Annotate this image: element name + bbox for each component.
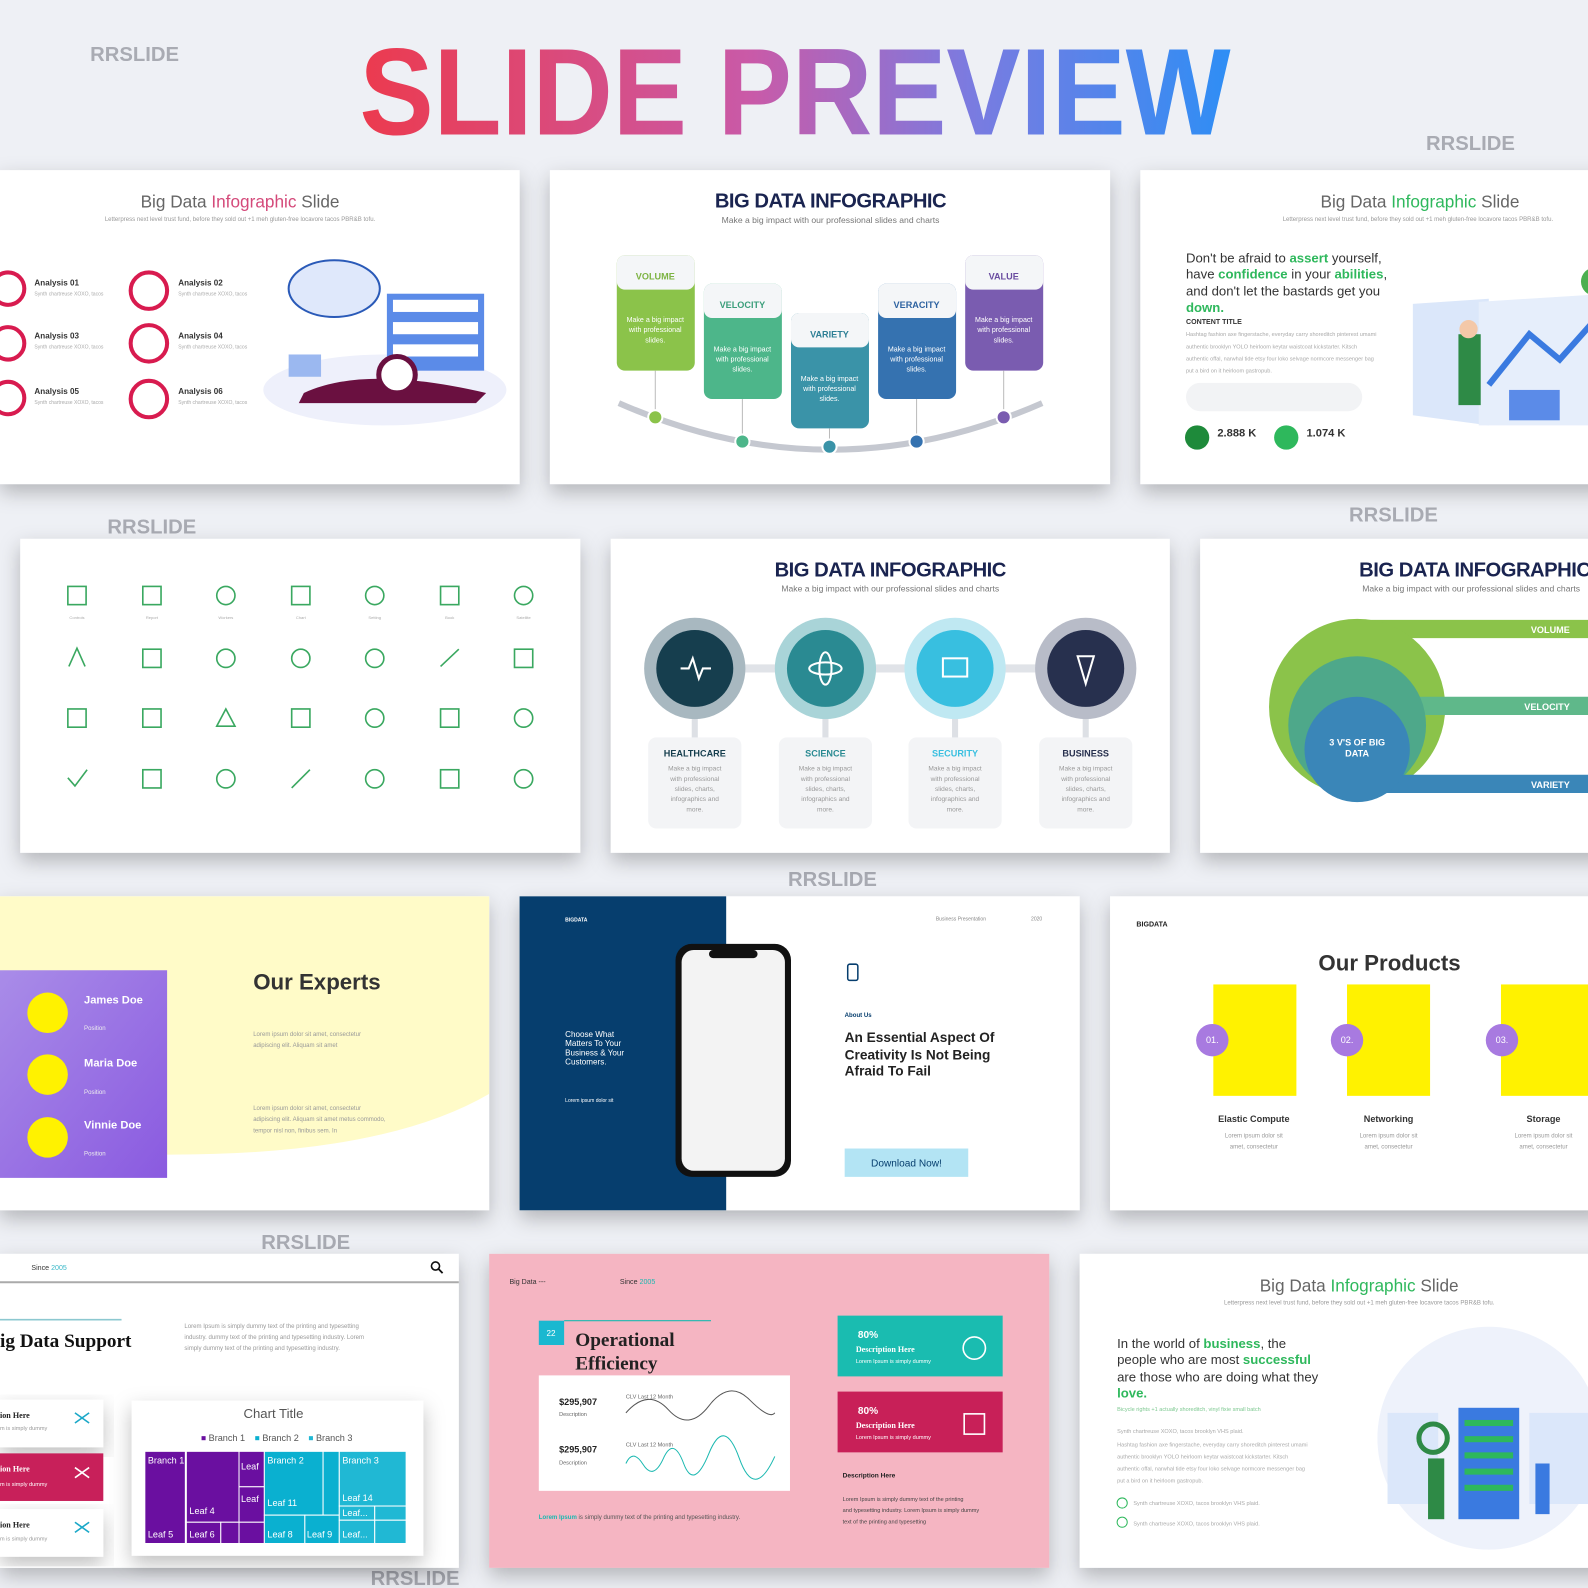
slide: analysis: Big Data Infographic Slide xyxy=(141,192,340,212)
slide: assert yourself: authentic offal, narwhal tide etsy four loko selvage normcore messenger bag xyxy=(1186,357,1374,363)
slide: operational efficiency: 22 xyxy=(546,1329,556,1338)
slide: operational efficiency: Description Here xyxy=(856,1345,915,1354)
slide: big data infographic 5V: with professional xyxy=(802,385,856,393)
slide: big data support treemap: ion Here xyxy=(0,1465,30,1474)
watermark: RRSLIDE xyxy=(90,44,179,66)
slide: icon grid: Report xyxy=(146,615,159,620)
slide: big data infographic 5V: Make a big impact xyxy=(801,375,858,383)
slide: big data infographic 5V: VOLUME xyxy=(636,272,675,282)
slide: operational efficiency: CLV Last 12 Month xyxy=(626,1442,673,1448)
slide: 3 Vs: VOLUME xyxy=(1531,625,1570,635)
slide: big data infographic 5V: slides. xyxy=(907,366,927,374)
illustration: server xyxy=(1377,1327,1588,1550)
slide: phone: Creativity Is Not Being xyxy=(845,1047,990,1062)
slide: assert yourself: Letterpress next level trust fund, before they sold out +1 meh gluten-free locavore tacos PBR&B tofu. xyxy=(1283,217,1553,223)
slide: world of business: Hashtag fashion axe fingerstache, everyday carry shoreditch pinterest umami xyxy=(1117,1442,1308,1448)
slide: 4 circles: more. xyxy=(1077,806,1094,813)
slide: icon grid: Controls xyxy=(69,615,85,620)
slide: world of business: In the world of business, the xyxy=(1117,1336,1286,1351)
slide: assert yourself: CONTENT TITLE xyxy=(1186,318,1242,326)
slide: world of business: Big Data Infographic Slide xyxy=(1260,1275,1459,1295)
slide: phone: Business & Your xyxy=(565,1048,624,1057)
slide: our experts: Maria Doe xyxy=(84,1057,137,1069)
slide: analysis: Analysis 04 xyxy=(178,331,223,340)
slide: big data support treemap: simply dummy text of the printing and typesetting industry. xyxy=(184,1346,340,1352)
slide: phone xyxy=(520,896,1080,1210)
chart: treemap: Branch 3 xyxy=(316,1433,352,1443)
slide: 4 circles xyxy=(611,539,1170,853)
slide: operational efficiency xyxy=(489,1254,1049,1568)
slide: operational efficiency: text of the printing and typesetting xyxy=(843,1519,926,1525)
slide: our products: Storage xyxy=(1527,1114,1560,1124)
slide: 3 Vs xyxy=(1200,539,1588,853)
slide: analysis: Letterpress next level trust fund, before they sold out +1 meh gluten-free locavore tacos PBR&B tofu. xyxy=(105,217,376,223)
slide: 4 circles: HEALTHCARE xyxy=(664,749,726,759)
slide: operational efficiency: Description xyxy=(559,1412,587,1418)
slide: big data infographic 5V: with professional xyxy=(628,326,682,334)
phone xyxy=(676,944,791,1177)
slide: analysis: Synth chartreuse XOXO, tacos xyxy=(34,344,104,350)
slide: big data support treemap: ig Data Support xyxy=(0,1331,132,1352)
slide: 4 circles: SECURITY xyxy=(932,749,978,759)
chart: treemap: Leaf 8 xyxy=(267,1529,293,1539)
slide: analysis: Synth chartreuse XOXO, tacos xyxy=(34,400,104,406)
slide: assert yourself: have confidence in your abilities, xyxy=(1186,267,1387,282)
chart: treemap: Branch 3 xyxy=(342,1455,379,1465)
slide: world of business: Letterpress next level trust fund, before they sold out +1 meh gluten-free locavore tacos PBR&B tofu. xyxy=(1224,1300,1495,1306)
slide: analysis: Analysis 02 xyxy=(178,279,223,288)
slide: analysis: Analysis 05 xyxy=(34,387,79,396)
chart: treemap: Branch 1 xyxy=(148,1455,184,1465)
slide: phone: Download Now! xyxy=(871,1159,942,1170)
slide: world of business: Synth chartreuse XOXO, tacos brooklyn VHS plaid. xyxy=(1133,1501,1260,1507)
slide: 4 circles: slides, charts, xyxy=(675,786,715,793)
slide: 3 Vs: VARIETY xyxy=(1531,780,1570,790)
slide: big data support treemap: Since 2005 xyxy=(31,1264,67,1272)
slide: our products: 03. xyxy=(1496,1035,1508,1045)
slide: icon grid: Setting xyxy=(368,615,381,620)
slide: our experts xyxy=(0,896,489,1210)
slide: 4 circles: Make a big impact xyxy=(928,766,982,773)
slide: operational efficiency: Description xyxy=(559,1461,587,1467)
slide: assert yourself: Don't be afraid to assert yourself, xyxy=(1186,250,1382,265)
watermark: RRSLIDE xyxy=(261,1232,350,1254)
chart: treemap: Leaf... xyxy=(342,1508,368,1518)
slide: our products xyxy=(1110,896,1588,1210)
slide: world of business: Synth chartreuse XOXO, tacos brooklyn VHS plaid. xyxy=(1133,1521,1260,1527)
slide: big data support treemap: m is simply dummy xyxy=(0,1426,48,1432)
slide: big data infographic 5V: slides. xyxy=(732,366,752,374)
slide: our experts: adipiscing elit. Aliquam sit amet xyxy=(253,1043,338,1049)
chart: treemap: Branch 2 xyxy=(262,1433,299,1443)
slide: operational efficiency: Lorem Ipsum is simply dummy text of the printing xyxy=(843,1497,964,1503)
slide: analysis: Synth chartreuse XOXO, tacos xyxy=(178,400,248,406)
slide: 4 circles: infographics and xyxy=(931,796,980,803)
slide: analysis: Analysis 06 xyxy=(178,387,223,396)
slide: 4 circles: SCIENCE xyxy=(805,749,846,759)
slide: 4 circles: with professional xyxy=(1060,776,1111,783)
slide: operational efficiency: and typesetting industry. Lorem Ipsum is simply dummy xyxy=(843,1508,979,1514)
chart: treemap: Leaf 6 xyxy=(189,1529,215,1539)
slide: big data infographic 5V: with professional xyxy=(715,356,769,364)
slide: 4 circles: Make a big impact xyxy=(799,766,852,773)
slide: assert yourself: down. xyxy=(1186,300,1224,315)
slide: world of business: love. xyxy=(1117,1386,1147,1401)
slide: our experts: Vinnie Doe xyxy=(84,1119,141,1131)
slide: big data infographic 5V: slides. xyxy=(819,395,840,403)
slide: our products: 02. xyxy=(1341,1035,1353,1045)
chart: treemap: Chart Title xyxy=(243,1406,303,1421)
slide: big data infographic 5V: Make a big impact xyxy=(975,316,1032,324)
slide: our products: amet, consectetur xyxy=(1519,1145,1568,1151)
slide: phone: Lorem ipsum dolor sit xyxy=(565,1098,614,1104)
slide: our products: Lorem ipsum dolor sit xyxy=(1225,1133,1283,1139)
slide: our products: Lorem ipsum dolor sit xyxy=(1515,1133,1573,1139)
slide: 4 circles: BIG DATA INFOGRAPHIC xyxy=(775,559,1007,581)
slide: phone: 2020 xyxy=(1031,917,1042,923)
slide: 4 circles: with professional xyxy=(930,776,980,783)
illustration: cloud server xyxy=(263,260,506,425)
slide: big data support treemap: industry. dummy text of the printing and typesetting industry. Lorem xyxy=(184,1335,364,1341)
slide: world of business: Bicycle rights +1 actually shoreditch, vinyl fixie small batch xyxy=(1117,1407,1261,1413)
slide: analysis: Synth chartreuse XOXO, tacos xyxy=(178,292,248,298)
chart: treemap: Leaf xyxy=(241,1494,259,1504)
chart: treemap: Leaf xyxy=(241,1462,259,1472)
slide: assert yourself: and don't let the bastards get you xyxy=(1186,284,1380,299)
slide: 4 circles: more. xyxy=(947,806,964,813)
slide: assert yourself: put a bird on it heirloom gastropub. xyxy=(1186,369,1272,375)
chart: treemap: Leaf 4 xyxy=(189,1506,215,1516)
slide: operational efficiency: 80% xyxy=(858,1330,878,1341)
slide: our products: amet, consectetur xyxy=(1230,1145,1278,1151)
slide: assert yourself: Hashtag fashion axe fingerstache, everyday carry shoreditch pinterest umami xyxy=(1186,332,1376,338)
slide: world of business xyxy=(1080,1254,1588,1568)
watermark: RRSLIDE xyxy=(107,517,196,539)
slide: our products: 01. xyxy=(1206,1035,1219,1045)
slide: our products: Our Products xyxy=(1318,950,1461,975)
slide: phone: Choose What xyxy=(565,1030,615,1039)
slide: phone: Business Presentation xyxy=(936,917,986,923)
slide: icon grid xyxy=(20,539,580,853)
slide: big data infographic 5V: VELOCITY xyxy=(720,300,765,310)
slide: phone: Customers. xyxy=(565,1057,607,1066)
watermark: RRSLIDE xyxy=(1349,505,1438,527)
slide: 4 circles: more. xyxy=(686,806,703,813)
slide: operational efficiency: $295,907 xyxy=(559,1397,597,1407)
slide: big data infographic 5V: with professional xyxy=(889,356,943,364)
slide: our experts: Our Experts xyxy=(253,970,381,995)
slide: our experts: Lorem ipsum dolor sit amet, consectetur xyxy=(253,1032,361,1038)
slide: assert yourself: authentic brooklyn YOLO heirloom keytar waistcoat kickstarter. Kitsch xyxy=(1186,344,1357,350)
slide: analysis: Analysis 03 xyxy=(34,331,79,340)
slide: big data infographic 5V xyxy=(550,170,1110,484)
slide: analysis: Analysis 01 xyxy=(34,279,79,288)
slide: big data infographic 5V: Make a big impact xyxy=(888,345,945,353)
slide: our products: Elastic Compute xyxy=(1218,1114,1290,1124)
slide: 3 Vs: BIG DATA INFOGRAPHIC xyxy=(1359,559,1588,581)
slide: phone: About Us xyxy=(845,1013,872,1019)
slide: our experts: James Doe xyxy=(84,995,143,1007)
slide: big data infographic 5V: VARIETY xyxy=(810,329,849,339)
slide: our products: amet, consectetur xyxy=(1364,1145,1413,1151)
slide: 4 circles: Make a big impact xyxy=(668,766,722,773)
watermark: RRSLIDE xyxy=(1426,133,1515,155)
slide: assert yourself: Big Data Infographic Slide xyxy=(1320,192,1519,212)
slide: world of business: authentic brooklyn YOLO heirloom keytar waistcoat kickstarter. Kitsch xyxy=(1117,1454,1288,1460)
slide: operational efficiency: Big Data --- xyxy=(509,1278,546,1286)
slide: world of business: Synth chartreuse XOXO, tacos brooklyn VHS plaid. xyxy=(1117,1429,1244,1435)
slide: assert yourself: 1.074 K xyxy=(1307,428,1345,440)
slide: 3 Vs: DATA xyxy=(1345,749,1370,759)
slide: big data infographic 5V: Make a big impact xyxy=(627,316,684,324)
slide: our products: BIGDATA xyxy=(1136,921,1168,929)
slide: 4 circles: Make a big impact with our professional slides and charts xyxy=(781,583,999,593)
slide: operational efficiency: 80% xyxy=(858,1406,878,1417)
slide: assert yourself: 2.888 K xyxy=(1217,428,1256,440)
slide: big data infographic 5V: VERACITY xyxy=(894,300,940,310)
slide: 4 circles: with professional xyxy=(669,776,720,783)
slide: assert yourself xyxy=(1140,170,1588,484)
slide: 3 Vs: Make a big impact with our professional slides and charts xyxy=(1362,583,1580,593)
chart: treemap xyxy=(132,1401,423,1556)
slide: 4 circles: more. xyxy=(817,806,834,813)
slide: analysis: Synth chartreuse XOXO, tacos xyxy=(34,292,104,298)
slide: 4 circles: infographics and xyxy=(671,796,719,803)
chart: treemap: Leaf 11 xyxy=(267,1498,297,1508)
slide: operational efficiency: Description Here xyxy=(843,1473,896,1480)
slide: operational efficiency: Description Here xyxy=(856,1421,915,1430)
chart: treemap: Leaf 9 xyxy=(307,1529,332,1539)
slide: big data support treemap: Lorem Ipsum is simply dummy text of the printing and typesetting xyxy=(184,1324,359,1330)
slide: big data infographic 5V: BIG DATA INFOGRAPHIC xyxy=(715,191,947,213)
slide: operational efficiency: CLV Last 12 Month xyxy=(626,1395,673,1401)
slide: analysis xyxy=(0,170,520,484)
slide: 4 circles: BUSINESS xyxy=(1062,749,1109,759)
slide: big data support treemap: ion Here xyxy=(0,1520,30,1529)
slide: operational efficiency: Efficiency xyxy=(575,1353,658,1374)
slide: icon grid: Book xyxy=(445,615,455,620)
slide: operational efficiency: $295,907 xyxy=(559,1444,597,1454)
slide: big data infographic 5V: Make a big impact with our professional slides and charts xyxy=(722,215,939,225)
chart: treemap: Leaf 5 xyxy=(148,1529,173,1539)
slide: our experts: adipiscing elit. Aliquam sit amet metus commodo, xyxy=(253,1117,386,1123)
illustration: analytics person xyxy=(1413,267,1588,425)
slide: 4 circles: infographics and xyxy=(801,796,850,803)
slide: our experts: Position xyxy=(84,1090,106,1096)
chart: treemap: Branch 2 xyxy=(267,1455,304,1465)
slide: world of business: people who are most successful xyxy=(1117,1352,1311,1367)
slide: 3 Vs: VELOCITY xyxy=(1524,702,1570,712)
slide: big data infographic 5V: slides. xyxy=(645,336,665,344)
title: SLIDE PREVIEW xyxy=(360,24,1231,162)
slide: 3 Vs: 3 V'S OF BIG xyxy=(1329,737,1385,747)
slide: operational efficiency: Operational xyxy=(575,1330,675,1351)
slide: 4 circles: slides, charts, xyxy=(805,786,846,793)
slide: world of business: authentic offal, narwhal tide etsy four loko selvage normcore messenger bag xyxy=(1117,1467,1305,1473)
slide: 4 circles: slides, charts, xyxy=(1066,786,1106,793)
slide: big data infographic 5V: slides. xyxy=(994,336,1014,344)
slide: operational efficiency: Lorem Ipsum is simply dummy xyxy=(856,1359,931,1365)
slide: phone: BIGDATA xyxy=(565,918,588,924)
chart: treemap: Branch 1 xyxy=(209,1433,245,1443)
slide: our experts: Position xyxy=(84,1026,106,1032)
slide: our experts: Lorem ipsum dolor sit amet, consectetur xyxy=(253,1106,361,1112)
slide: big data support treemap: m is simply dummy xyxy=(0,1536,48,1542)
slide: big data support treemap: m is simply dummy xyxy=(0,1482,48,1488)
slide: icon grid: Workers xyxy=(218,615,233,620)
slide: icon grid: Satellite xyxy=(516,615,532,620)
slide: operational efficiency: Lorem Ipsum is simply dummy text of the printing and typesetting industry. xyxy=(539,1515,741,1521)
slide: phone: Matters To Your xyxy=(565,1039,622,1048)
slide: analysis: Synth chartreuse XOXO, tacos xyxy=(178,344,248,350)
slide: 4 circles: with professional xyxy=(800,776,850,783)
slide: operational efficiency: Lorem Ipsum is simply dummy xyxy=(856,1435,931,1441)
slide: our products: Networking xyxy=(1364,1114,1413,1124)
slide: 4 circles: slides, charts, xyxy=(935,786,975,793)
chart: treemap: Leaf... xyxy=(342,1529,368,1539)
slide: big data infographic 5V: Make a big impact xyxy=(714,345,771,353)
slide: our products: Lorem ipsum dolor sit xyxy=(1360,1133,1418,1139)
slide: world of business: are those who are doing what they xyxy=(1117,1369,1319,1384)
slide: big data infographic 5V: VALUE xyxy=(989,272,1019,282)
slide: operational efficiency: Since 2005 xyxy=(620,1278,655,1286)
slide: phone: An Essential Aspect Of xyxy=(845,1030,995,1045)
slide: our experts: Position xyxy=(84,1152,106,1158)
slide: world of business: put a bird on it heirloom gastropub. xyxy=(1117,1479,1204,1485)
watermark: RRSLIDE xyxy=(788,869,877,891)
slide: 4 circles: Make a big impact xyxy=(1059,766,1113,773)
slide: icon grid: Chart xyxy=(296,615,307,620)
slide: big data support treemap xyxy=(0,1254,459,1568)
slide: phone: Afraid To Fail xyxy=(845,1064,931,1079)
slide: big data support treemap: ion Here xyxy=(0,1411,30,1420)
slide: 4 circles: infographics and xyxy=(1062,796,1110,803)
slide: big data infographic 5V: with professional xyxy=(976,326,1030,334)
slide: our experts: tempor nisl non, finibus sem. In xyxy=(253,1128,337,1134)
chart: treemap: Leaf 14 xyxy=(342,1493,373,1503)
